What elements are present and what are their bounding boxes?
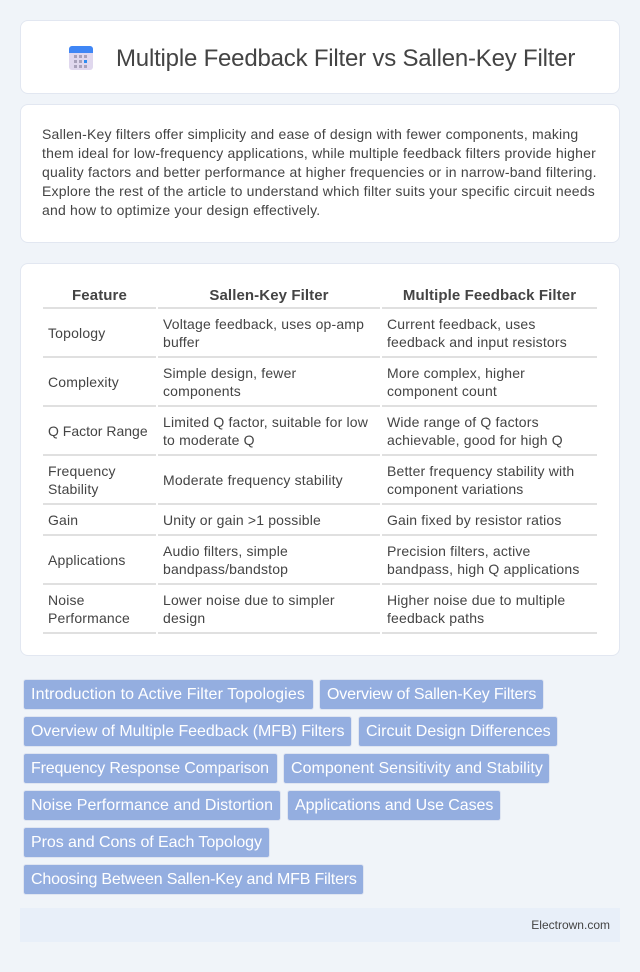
row: Frequency Stability: Better frequency stability with [387,463,574,479]
row: Frequency Stability: Frequency [48,463,116,479]
row: Topology: feedback and input resistors [387,334,567,350]
row: Q Factor Range: achievable, good for high Q [387,432,563,448]
row: Gain: Gain fixed by resistor ratios [387,512,562,528]
row: Frequency Stability: component variations [387,481,523,497]
panel: comparison table [20,263,620,656]
table header: Sallen-Key Filter [209,287,329,304]
row: Noise Performance: Noise [48,592,85,608]
row: Complexity: More complex, higher [387,365,525,381]
row: Topology [43,316,597,358]
row: Complexity: components [163,383,241,399]
tag [319,679,544,710]
row: Gain: Unity or gain >1 possible [163,512,321,528]
row: Noise Performance: feedback paths [387,610,484,626]
table header: Feature [72,287,127,304]
row: Topology: Voltage feedback, uses op-amp [163,316,364,332]
row: Applications: Precision filters, active [387,543,531,559]
tag: Pros and Cons of Each Topology [31,834,262,851]
table header [43,287,597,309]
tag [358,716,558,747]
row: Applications: bandpass/bandstop [163,561,288,577]
row: Complexity [43,365,597,407]
tag [23,716,352,747]
intro text: them ideal for low-frequency applications, while multiple feedback filters provide higher [42,145,596,161]
row: Q Factor Range: Limited Q factor, suitable for low [163,414,368,430]
row: Noise Performance [43,592,597,634]
row: Noise Performance: design [163,610,205,626]
row: Applications: Applications [48,552,126,568]
tag: Noise Performance and Distortion [31,797,273,814]
tag [23,753,278,784]
row: Q Factor Range: Wide range of Q factors [387,414,539,430]
row: Noise Performance: Performance [48,610,130,626]
intro text: quality factors and better performance at higher frequencies or in narrow-band filtering. [42,164,597,180]
tag: Overview of Multiple Feedback (MFB) Filters [31,723,344,740]
row: Topology: Topology [48,325,105,341]
intro text: and how to optimize your design effectively. [42,202,320,218]
icon: calendar grid [69,46,93,70]
row: Q Factor Range [43,414,597,456]
tag [287,790,501,821]
tag: Circuit Design Differences [366,723,551,740]
row: Gain [43,512,597,536]
footer bar [20,908,620,942]
table header: Multiple Feedback Filter [403,287,576,304]
row: Applications [43,543,597,585]
tag [283,753,550,784]
tag [23,679,314,710]
intro text: Sallen-Key filters offer simplicity and ease of design with fewer components, making [42,126,578,142]
row: Q Factor Range: to moderate Q [163,432,255,448]
row: Complexity: Complexity [48,374,119,390]
row: Q Factor Range: Q Factor Range [48,423,148,439]
row: Topology: Current feedback, uses [387,316,535,332]
intro text: Explore the rest of the article to understand which filter suits your specific circuit needs [42,183,595,199]
tag [23,790,281,821]
row: Gain: Gain [48,512,78,528]
tag: Component Sensitivity and Stability [291,760,543,777]
panel: introduction [20,104,620,243]
row: Frequency Stability: Stability [48,481,99,497]
row: Frequency Stability: Moderate frequency stability [163,472,343,488]
footer credit: Electrown.com [531,918,610,932]
tag [23,864,364,895]
title: Multiple Feedback Filter vs Sallen-Key Filter [116,45,575,72]
row: Complexity: Simple design, fewer [163,365,296,381]
row: Applications: bandpass, high Q applications [387,561,580,577]
row: Frequency Stability [43,463,597,505]
tag: Overview of Sallen-Key Filters [327,686,536,703]
row: Noise Performance: Lower noise due to simpler [163,592,335,608]
panel: title header [20,20,620,94]
row: Topology: buffer [163,334,200,350]
row: Noise Performance: Higher noise due to multiple [387,592,565,608]
tag: Applications and Use Cases [295,797,493,814]
row: Complexity: component count [387,383,497,399]
tag [23,827,270,858]
tag group: article topics [23,679,558,895]
tag: Choosing Between Sallen-Key and MFB Filters [31,871,357,888]
intro text [42,126,597,218]
tag: Introduction to Active Filter Topologies [31,686,305,703]
tag: Frequency Response Comparison [31,760,269,777]
row: Applications: Audio filters, simple [163,543,288,559]
